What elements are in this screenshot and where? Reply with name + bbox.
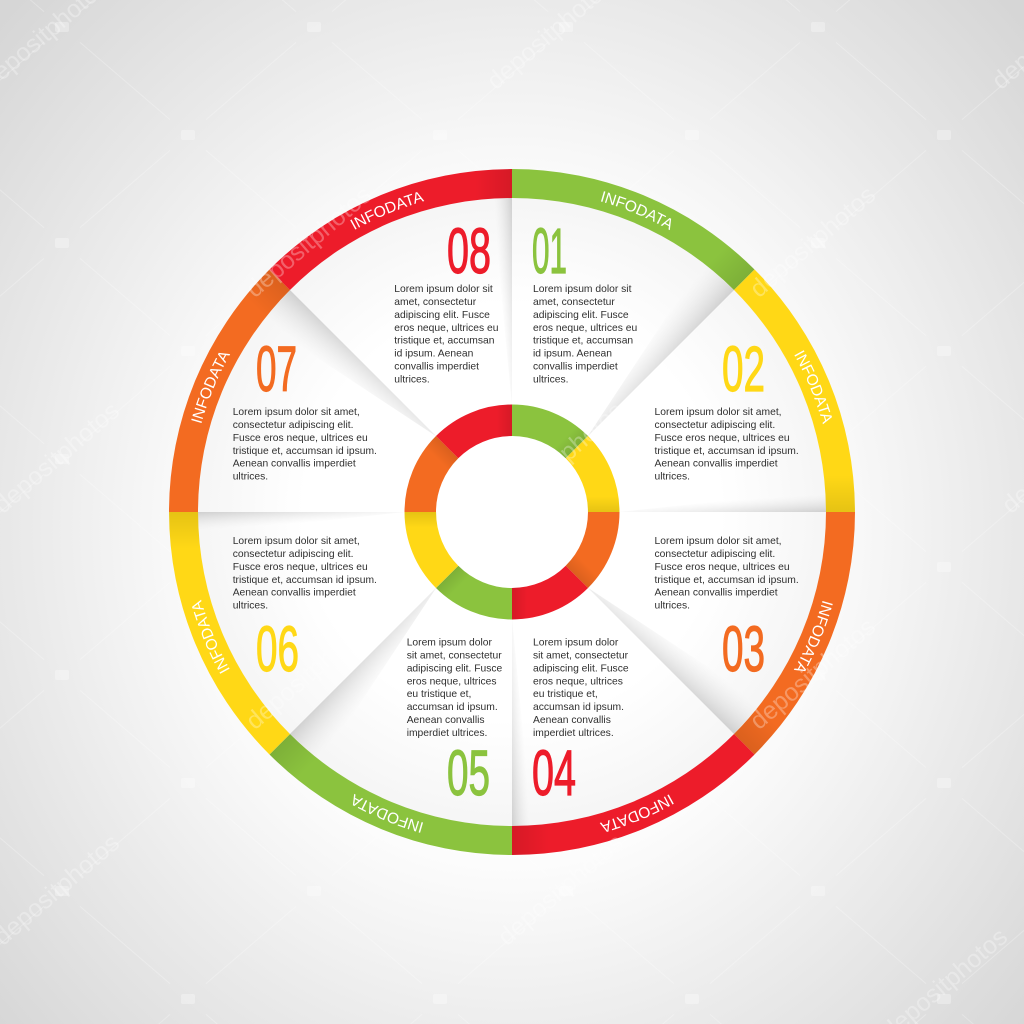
outer band segment 08: [269, 98, 526, 355]
band label 03: INFODATA: [794, 601, 833, 672]
body text 06: tristique et, accumsan id ipsum.: [233, 575, 377, 586]
body text 05: imperdiet ultrices.: [407, 728, 487, 739]
body text 04: sit amet, consectetur: [533, 650, 629, 662]
body text 08: adipiscing elit. Fusce: [394, 310, 490, 321]
body text 06: Lorem ipsum dolor sit amet,: [233, 536, 360, 547]
body text 05: sit amet, consectetur: [407, 650, 502, 662]
body text 01: tristique et, accumsan: [533, 336, 633, 346]
inner ring segment 02: [550, 436, 642, 528]
body text 05: eu tristique et,: [407, 689, 471, 700]
body text 07: Fusce eros neque, ultrices eu: [233, 433, 368, 444]
body text 05: adipiscing elit. Fusce: [407, 664, 503, 674]
inner ring segment 07: [404, 436, 458, 512]
panel 03: [566, 512, 855, 754]
outer band segment 06: [98, 498, 355, 755]
band label 07: INFODATA: [191, 352, 230, 423]
body text 03: tristique et, accumsan id ipsum.: [654, 575, 799, 586]
body text 04: Lorem ipsum dolor: [533, 638, 619, 648]
band label 06: INFODATA: [192, 600, 230, 674]
panel 01: 01: [532, 215, 567, 287]
inner ring segment 01: [512, 404, 588, 458]
body text 03: Lorem ipsum dolor sit amet,: [654, 536, 782, 547]
number 03: 03: [722, 613, 765, 685]
outer band segment 03: [734, 512, 855, 754]
body text 08: tristique et, accumsan: [394, 336, 495, 346]
body text 07: tristique et, accumsan id ipsum.: [233, 446, 377, 457]
body text 03: Aenean convallis imperdiet: [654, 588, 778, 598]
body text 05: accumsan id ipsum.: [407, 702, 498, 713]
number 06: 06: [256, 613, 299, 685]
body text 03: ultrices.: [654, 600, 690, 612]
body text 01: amet, consectetur: [533, 297, 615, 308]
body text 06: ultrices.: [233, 600, 268, 612]
body text 04: Aenean convallis: [533, 715, 611, 726]
body text 02: Lorem ipsum dolor sit amet,: [654, 407, 782, 418]
watermark: depositphotos words: depositphotos: [745, 181, 881, 303]
body text 03: Fusce eros neque, ultrices eu: [654, 562, 790, 573]
body text 05: eros neque, ultrices: [407, 676, 497, 688]
inner ring segment 08: [436, 382, 528, 474]
outer band segment 02: [669, 269, 926, 526]
number 02: 02: [722, 333, 765, 405]
number 08: 08: [447, 215, 491, 287]
body text 07: consectetur adipiscing elit.: [233, 420, 353, 431]
body text 06: consectetur adipiscing elit.: [233, 549, 353, 560]
watermark: depositphotos words: depositphotos: [241, 613, 377, 735]
body text 07: ultrices.: [233, 472, 268, 482]
watermark: depositphotos words: depositphotos: [493, 829, 629, 951]
number 05: 05: [447, 737, 490, 809]
body text 08: Lorem ipsum dolor sit: [394, 284, 493, 295]
center circle: [436, 436, 588, 588]
inner ring segment 04: [496, 550, 588, 642]
fold shadows between panels: [198, 198, 826, 826]
outer band segment 07: [169, 270, 290, 512]
watermark: depositphotos words: depositphotos: [745, 613, 881, 735]
inner ring segment 03: [566, 512, 620, 588]
body text 01: convallis imperdiet: [533, 362, 618, 372]
band label 05: INFODATA: [352, 794, 423, 833]
watermark: depositphotos words: depositphotos: [493, 397, 629, 519]
body text 06: Aenean convallis imperdiet: [233, 588, 356, 598]
body text 01: ultrices.: [533, 374, 568, 386]
body text 02: consectetur adipiscing elit.: [654, 420, 775, 431]
body text 03: consectetur adipiscing elit.: [654, 549, 775, 560]
outer band segment 01: [512, 169, 754, 290]
band label 04: INFODATA: [600, 794, 674, 832]
panel 04: [512, 566, 754, 855]
body text 04: eu tristique et,: [533, 689, 598, 700]
band label 08: INFODATA: [350, 192, 424, 230]
panel 07: [169, 270, 458, 512]
panel 01: [512, 169, 754, 458]
panel 08: [270, 169, 512, 458]
body text 08: amet, consectetur: [394, 297, 477, 308]
outer band segment 04: [498, 669, 755, 926]
body text 04: accumsan id ipsum.: [533, 702, 624, 713]
body text 08: convallis imperdiet: [394, 362, 479, 372]
panel 06: [169, 512, 458, 754]
outer band segment 05: [270, 734, 512, 855]
band label 02: INFODATA: [794, 350, 832, 424]
inner ring segment 06: [382, 496, 474, 588]
body text 04: eros neque, ultrices: [533, 676, 623, 688]
body text 07: Aenean convallis imperdiet: [233, 458, 356, 470]
body text 05: Lorem ipsum dolor: [407, 638, 493, 648]
body text 02: Fusce eros neque, ultrices eu: [654, 433, 790, 444]
body text 04: imperdiet ultrices.: [533, 728, 614, 739]
body text 05: Aenean convallis: [407, 715, 485, 726]
body text 07: Lorem ipsum dolor sit amet,: [233, 407, 360, 418]
body text 08: ultrices.: [394, 374, 430, 386]
body text 08: eros neque, ultrices eu: [394, 323, 499, 334]
panel 02: [566, 270, 855, 512]
body text 02: tristique et, accumsan id ipsum.: [654, 446, 799, 457]
body text 08: id ipsum. Aenean: [394, 348, 474, 360]
number 04: 04: [532, 737, 576, 809]
body text 01: eros neque, ultrices eu: [533, 323, 637, 334]
panel 05: [270, 566, 512, 855]
body text 01: adipiscing elit. Fusce: [533, 310, 629, 321]
inner ring segment 05: [436, 566, 512, 620]
body text 02: ultrices.: [654, 472, 690, 482]
disc background: [182, 182, 842, 842]
watermark: depositphotos words: depositphotos: [241, 181, 377, 303]
body text 01: id ipsum. Aenean: [533, 348, 612, 360]
number 07: 07: [256, 333, 297, 405]
body text 04: adipiscing elit. Fusce: [533, 664, 629, 674]
body text 06: Fusce eros neque, ultrices eu: [233, 562, 368, 573]
band label 01: INFODATA: [601, 191, 672, 230]
body text 02: Aenean convallis imperdiet: [654, 458, 778, 470]
body text 01: Lorem ipsum dolor sit: [533, 284, 632, 295]
